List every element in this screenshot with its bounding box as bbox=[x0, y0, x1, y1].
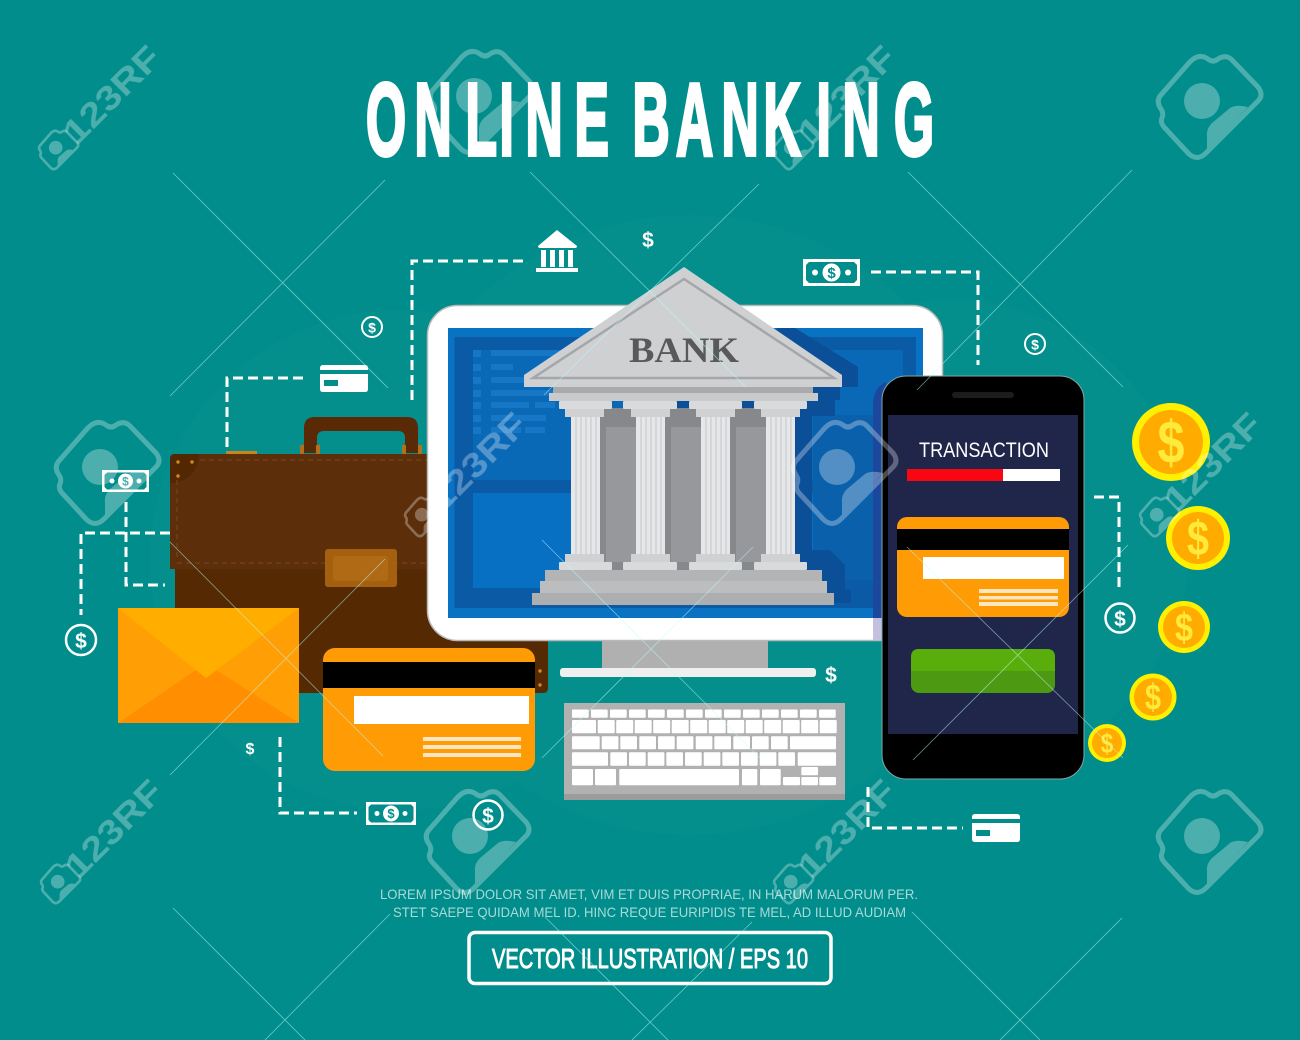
icon: dollar circle 3 bbox=[66, 625, 96, 655]
icon: banknote bottom bbox=[366, 802, 416, 825]
coin 1: $ bbox=[1158, 409, 1184, 476]
phone card bbox=[897, 517, 1069, 617]
infographic canvas: 123RF bbox=[791, 39, 904, 152]
icon: banknote left: $ bbox=[122, 474, 129, 488]
vector illustration badge: VECTOR ILLUSTRATION / EPS 10 bbox=[492, 943, 808, 974]
phone shadow on monitor bbox=[873, 382, 886, 618]
envelope bbox=[118, 608, 299, 723]
description text bbox=[380, 886, 918, 920]
icon: dollar circle 5: $ bbox=[482, 805, 494, 828]
description text: LOREM IPSUM DOLOR SIT AMET, VIM ET DUIS PROPRIAE, IN HARUM MALORUM PER. bbox=[380, 886, 918, 902]
stand bbox=[602, 640, 768, 668]
coin 1 bbox=[1132, 403, 1210, 481]
coin 4: $ bbox=[1145, 676, 1161, 718]
icon: dollar circle 2 bbox=[1025, 334, 1045, 354]
pediment bbox=[524, 267, 842, 387]
green button bbox=[911, 649, 1055, 693]
briefcase bbox=[170, 417, 548, 693]
icon: dollar circle 4 bbox=[1106, 604, 1134, 632]
description text: STET SAEPE QUIDAM MEL ID. HINC REQUE EURIPIDIS TE MEL, AD ILLUD AUDIAM bbox=[393, 904, 906, 920]
entablature bbox=[553, 387, 813, 393]
credit card bbox=[323, 648, 535, 771]
dashed connector lines bbox=[81, 261, 1119, 828]
infographic canvas: 123RF bbox=[422, 406, 535, 519]
bezel bbox=[428, 306, 942, 640]
icon: dollar circle 4: $ bbox=[1114, 608, 1126, 631]
handle bbox=[304, 417, 418, 453]
vector illustration badge bbox=[469, 932, 831, 984]
clasp bbox=[325, 549, 397, 587]
icon: dollar circle 3: $ bbox=[75, 630, 87, 653]
bank label: BANK bbox=[629, 330, 739, 370]
icon: dollar circle 1: $ bbox=[368, 320, 376, 336]
icon: banknote top right: $ bbox=[827, 265, 836, 282]
infographic canvas: 123RF bbox=[791, 773, 904, 886]
icon: banknote bottom: $ bbox=[387, 806, 395, 821]
screen bbox=[448, 328, 923, 618]
bank building bbox=[524, 267, 842, 605]
coin 5 bbox=[1088, 724, 1126, 762]
coin 2: $ bbox=[1187, 512, 1209, 566]
icon: dollar sign keyboard: $ bbox=[825, 664, 837, 687]
keyboard bbox=[564, 703, 845, 800]
progress bar bbox=[907, 469, 1060, 481]
coin 4 bbox=[1130, 674, 1176, 720]
title: ONLINE BANKING bbox=[366, 63, 934, 178]
icon: dollar circle 2: $ bbox=[1031, 336, 1039, 352]
coin 5: $ bbox=[1101, 728, 1114, 759]
icon: dollar sign top: $ bbox=[642, 229, 654, 252]
columns bbox=[559, 401, 807, 570]
infographic canvas: 123RF bbox=[56, 39, 169, 152]
infographic canvas: 123RF bbox=[1157, 406, 1270, 519]
icon: dollar circle 1 bbox=[362, 317, 382, 337]
back wall bbox=[600, 408, 766, 570]
coin 3: $ bbox=[1175, 606, 1193, 650]
infographic canvas: 123RF bbox=[58, 773, 171, 886]
coin 2 bbox=[1166, 506, 1230, 570]
transaction label: TRANSACTION bbox=[919, 439, 1049, 462]
steps bbox=[545, 570, 822, 581]
icon: bank small bbox=[536, 230, 578, 272]
icon: dollar circle 5 bbox=[474, 800, 502, 830]
smartphone bbox=[882, 376, 1084, 779]
coin 3 bbox=[1158, 601, 1210, 653]
icon: banknote top right bbox=[803, 259, 860, 286]
icon: card lower right bbox=[972, 814, 1020, 842]
icon: banknote left bbox=[102, 470, 149, 492]
monitor bbox=[428, 306, 942, 677]
building shadow bbox=[640, 328, 858, 603]
icon: card upper left bbox=[320, 365, 368, 392]
icon: dollar sign left: $ bbox=[246, 741, 255, 758]
